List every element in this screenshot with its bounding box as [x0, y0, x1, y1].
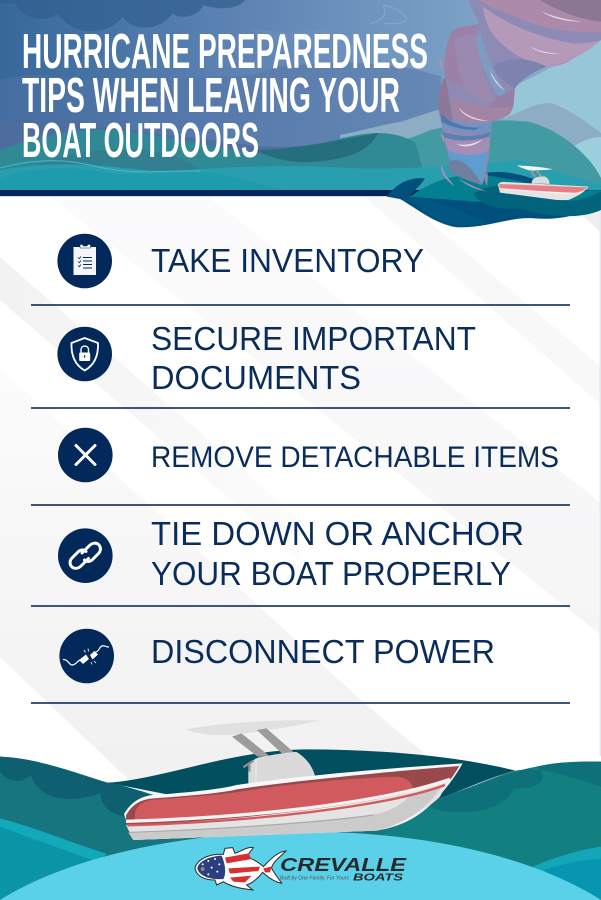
icon: unplugged cable [59, 629, 114, 683]
wave under small boat [387, 172, 601, 227]
icon: clipboard checklist [57, 234, 112, 288]
icon: cross [58, 428, 113, 482]
large boat [124, 720, 463, 840]
title [22, 25, 428, 168]
tip 1: take inventory [57, 234, 424, 288]
small boat [498, 165, 589, 200]
tip text: TIE DOWN OR ANCHOR [151, 515, 524, 552]
header illustration: stormy sky and sea [0, 0, 601, 227]
dark navy band [0, 190, 420, 196]
tip text: TAKE INVENTORY [151, 242, 424, 279]
icon: shield with padlock [57, 327, 112, 381]
logo: Crevalle Boats [195, 848, 407, 890]
tip 2: secure important documents [57, 320, 476, 396]
tip 4: tie down or anchor: YOUR BOAT PROPERLY [151, 555, 511, 592]
logo wordmark: CREVALLE [280, 855, 407, 875]
logo: Crevalle Boats: BOATS [353, 872, 403, 884]
icon: chain link [58, 528, 113, 583]
t-top canopy and posts [186, 720, 320, 757]
tip 2: secure important documents: DOCUMENTS [151, 359, 361, 396]
tip 5: disconnect power [59, 629, 495, 683]
dark storm clouds [0, 0, 441, 147]
title: BOAT OUTDOORS [22, 114, 259, 168]
tip text: REMOVE DETACHABLE ITEMS [151, 441, 559, 474]
tip 4: tie down or anchor [58, 515, 524, 592]
logo: Crevalle Boats: Built by One Family, For Yours [280, 876, 349, 882]
icon: flag-patterned fish [195, 848, 286, 890]
console and hull [124, 752, 463, 840]
tip text: DISCONNECT POWER [151, 633, 495, 670]
tornado [438, 0, 601, 192]
right background sky and mountains [340, 40, 601, 187]
footer illustration: waves [0, 749, 601, 900]
tip text: SECURE IMPORTANT [151, 320, 476, 357]
sea layers [0, 118, 601, 192]
tip 3: remove detachable items [58, 428, 559, 482]
